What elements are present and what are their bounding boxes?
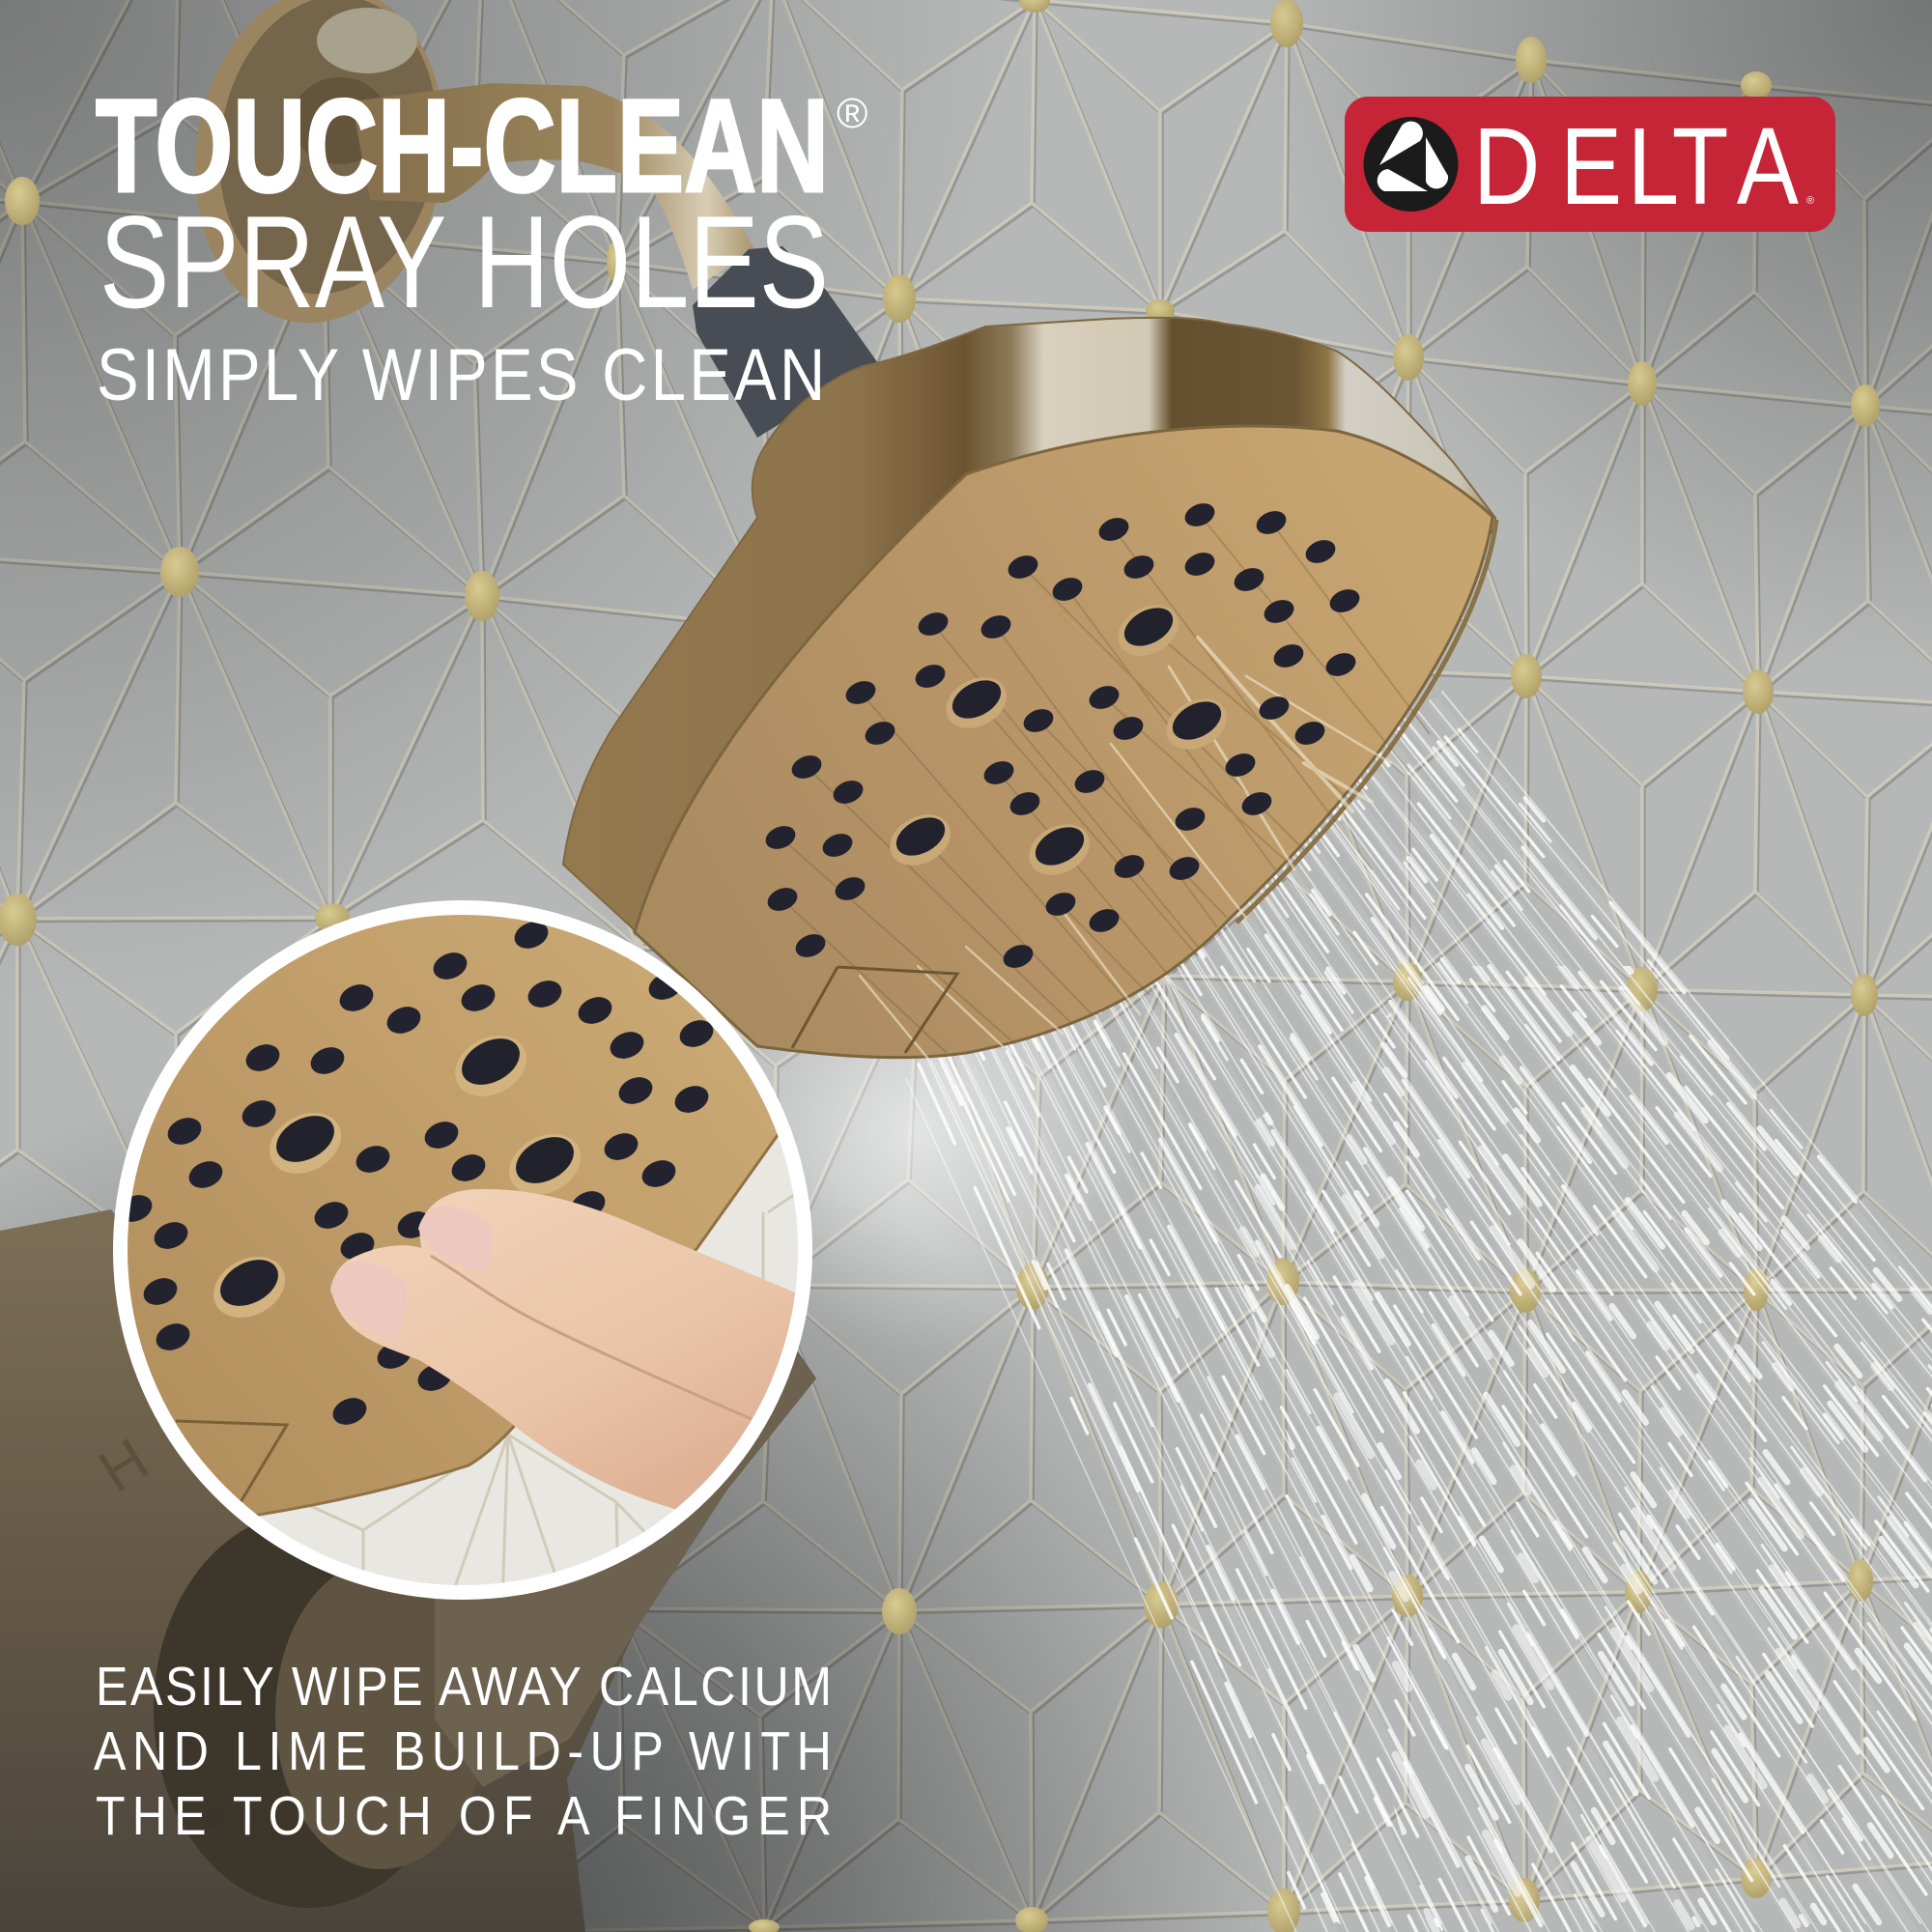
water sheen on face bbox=[860, 638, 1391, 1058]
inset mode tab bbox=[176, 1421, 287, 1502]
wall flange bbox=[174, 0, 466, 339]
heading: touch-clean: TOUCH-CLEAN bbox=[96, 72, 829, 220]
face spray nozzles bbox=[762, 499, 1363, 972]
inset white border bbox=[120, 908, 806, 1592]
registered mark: ® bbox=[837, 90, 867, 137]
valve dial bbox=[275, 1560, 488, 1869]
hot mark: H bbox=[88, 1426, 160, 1506]
logo triangle mark bbox=[1378, 122, 1448, 191]
lower fingernail bbox=[330, 1261, 408, 1339]
logo black circle bbox=[1364, 117, 1459, 212]
finger crease bbox=[431, 1256, 752, 1419]
upper fingernail bbox=[418, 1206, 494, 1271]
head face plate bbox=[635, 426, 1492, 1058]
subheading: SIMPLY WIPES CLEAN bbox=[97, 334, 825, 416]
inset close-up circle bbox=[113, 900, 812, 1600]
delta logo bbox=[1345, 97, 1835, 232]
valve handle ring bbox=[154, 1512, 463, 1908]
hose connector bbox=[693, 246, 878, 438]
inset tile lines bbox=[309, 1194, 794, 1585]
valve lever bbox=[435, 1348, 816, 1787]
shower head bbox=[563, 318, 1496, 1058]
inset tile background bbox=[259, 1137, 798, 1585]
fingers bbox=[330, 1189, 796, 1509]
shower arm bbox=[352, 83, 754, 290]
inset nozzles bbox=[114, 917, 718, 1430]
caption: AND LIME BUILD-UP WITH bbox=[94, 1720, 832, 1782]
caption: EASILY WIPE AWAY CALCIUM bbox=[96, 1656, 832, 1718]
heading: spray holes: SPRAY HOLES bbox=[99, 188, 829, 335]
logo red badge bbox=[1345, 97, 1835, 232]
flow channels on face bbox=[781, 515, 1430, 1053]
caption bbox=[94, 1656, 832, 1847]
logo registered mark: ® bbox=[1806, 195, 1814, 207]
bright wall glow under shower head bbox=[676, 898, 1159, 1362]
caption: THE TOUCH OF A FINGER bbox=[96, 1785, 832, 1847]
water spray bbox=[898, 691, 1932, 1932]
face outer rim bbox=[1236, 520, 1496, 923]
logo wordmark: DELTA bbox=[1473, 106, 1799, 228]
mode tab on face bbox=[792, 967, 957, 1053]
head side shell bbox=[563, 318, 1495, 1046]
inset clipped contents bbox=[128, 915, 798, 1585]
inset brass plate bbox=[128, 915, 779, 1517]
valve trim plate bbox=[0, 1209, 816, 1932]
valve screw bbox=[206, 1809, 225, 1829]
